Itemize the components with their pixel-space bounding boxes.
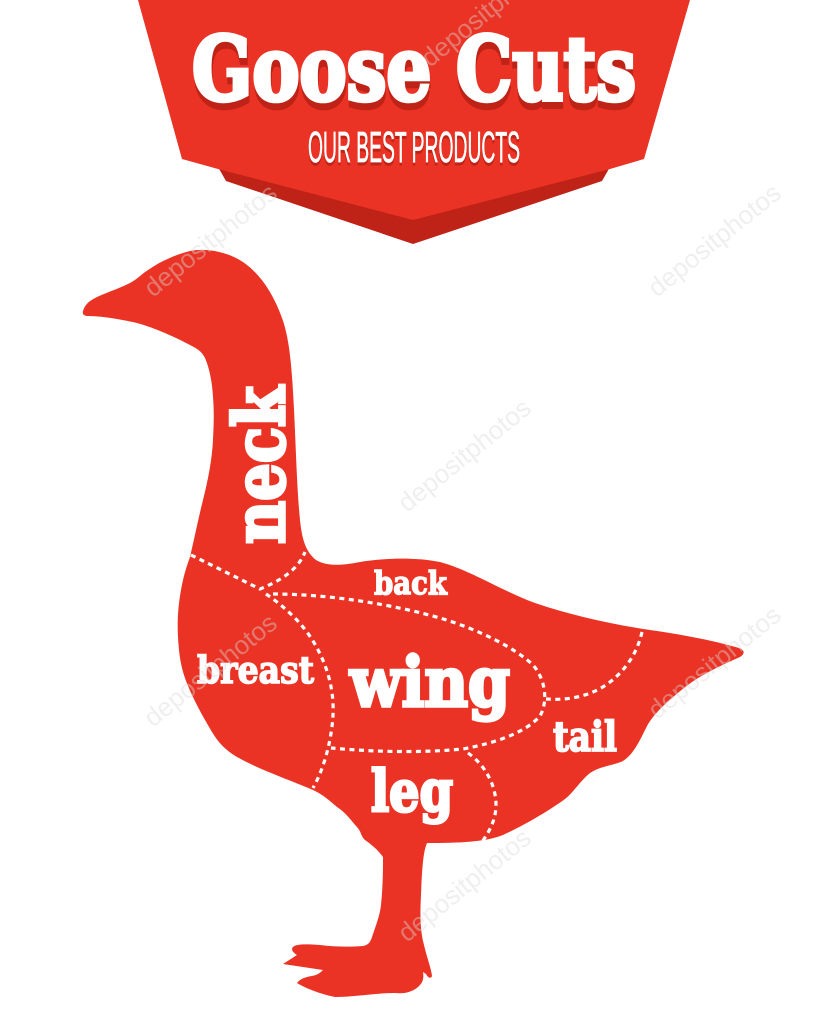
watermarks: depositphotos [392, 392, 537, 518]
subtitle [308, 123, 520, 175]
infographic canvas: OUR BEST PRODUCTS [308, 123, 520, 172]
label: back: back [374, 564, 448, 602]
banner body [138, 0, 690, 220]
watermarks: depositphotos [138, 177, 283, 303]
goose silhouette [83, 250, 744, 997]
banner [138, 0, 690, 244]
dashed cut lines [191, 552, 642, 842]
title: Goose Cuts [193, 24, 636, 128]
label: leg: leg [371, 758, 453, 825]
wing cut [273, 594, 545, 752]
title: Goose Cuts [192, 17, 636, 121]
neck cut [191, 552, 305, 589]
leg cut [468, 753, 496, 842]
infographic canvas: OUR BEST PRODUCTS [308, 126, 520, 175]
tail cut [546, 632, 642, 699]
watermarks: depositphotos [642, 177, 787, 303]
breast cut [266, 594, 333, 788]
label: breast: breast [197, 648, 314, 692]
watermarks: depositphotos [392, 822, 537, 948]
label: neck: neck [218, 385, 301, 544]
watermarks: depositphotos [642, 599, 787, 725]
watermarks [138, 0, 787, 948]
label: wing: wing [349, 643, 510, 723]
watermarks: depositphotos [138, 607, 283, 733]
banner shadow fold [218, 167, 610, 244]
label: tail: tail [553, 713, 617, 761]
